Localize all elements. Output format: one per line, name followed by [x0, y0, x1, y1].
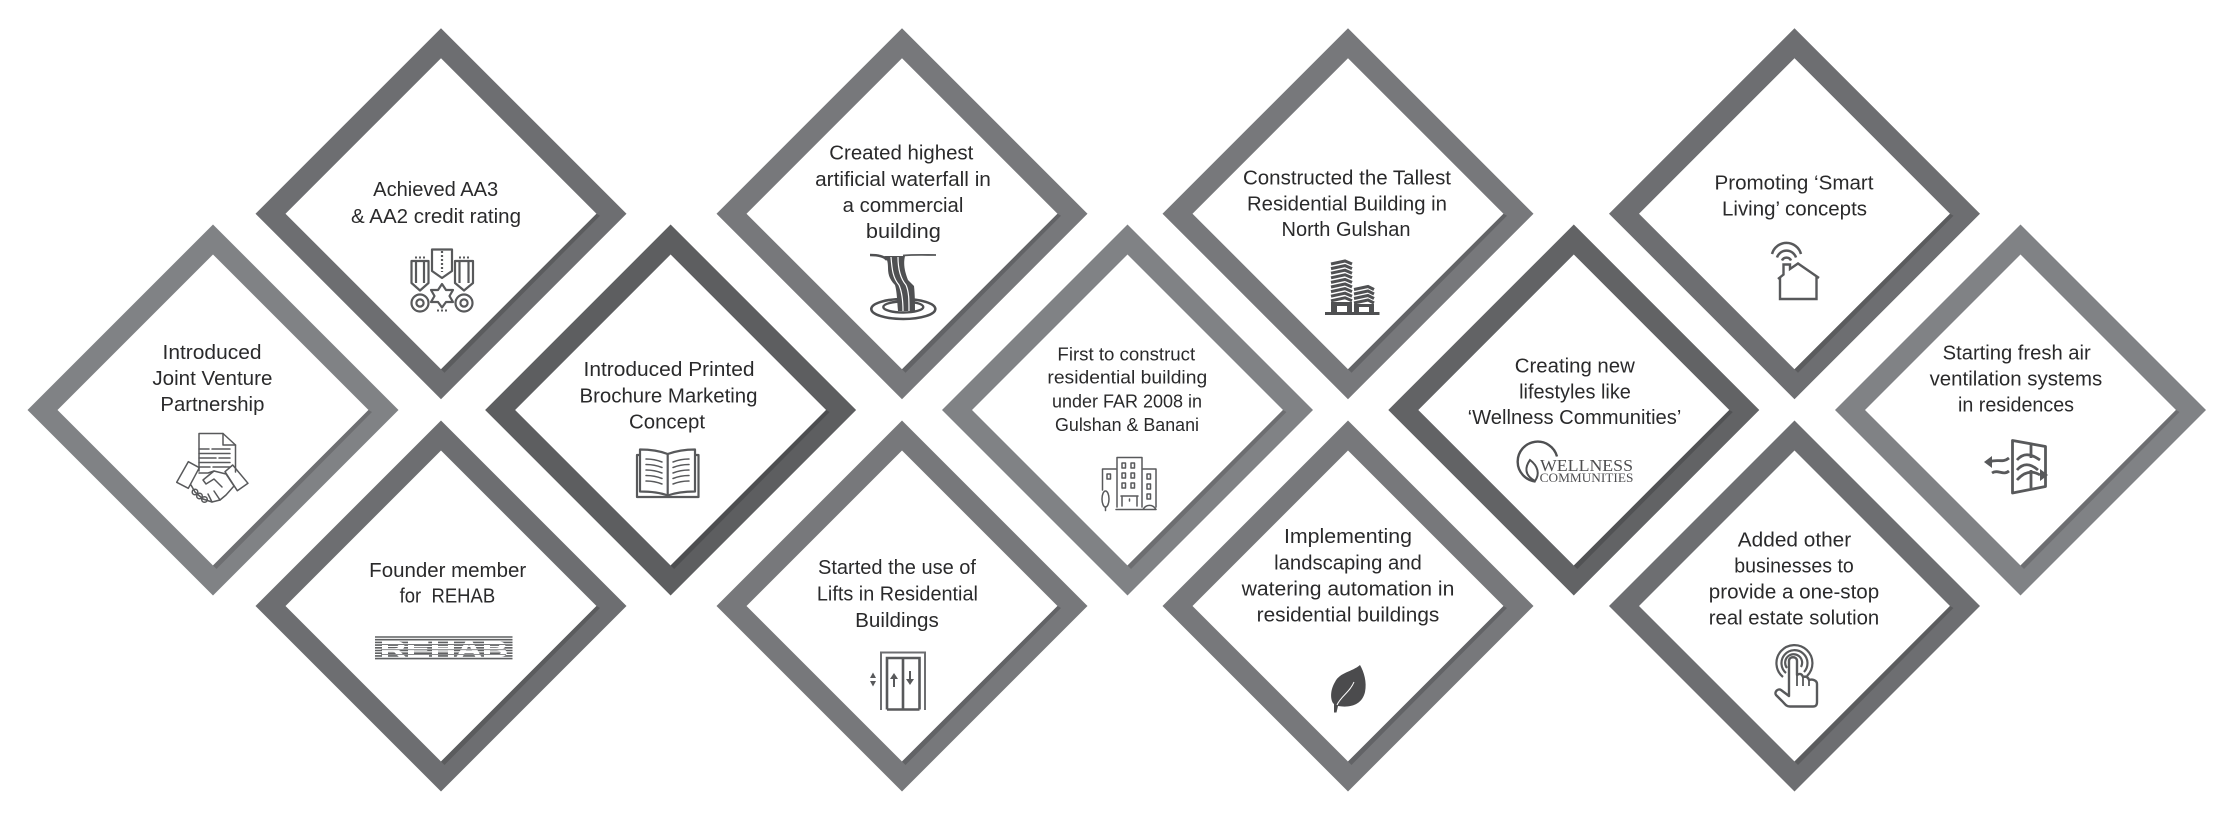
text: smart living: Living’ concepts: [1722, 198, 1867, 220]
panel: FAR 2008: [942, 224, 1313, 596]
text: tallest building: [1243, 168, 1451, 241]
text: FAR 2008: residential building: [1047, 368, 1207, 388]
panel: wellness communities: [1388, 224, 1759, 596]
icon: smart home: [1772, 243, 1819, 299]
text: founder member: [369, 560, 527, 608]
panel: one-stop solution: [1609, 420, 1980, 792]
panel: tallest building: [1162, 28, 1534, 399]
text: artificial waterfall: Created highest: [829, 143, 974, 165]
text: smart living: [1714, 173, 1874, 220]
text: lifts: Buildings: [855, 610, 939, 632]
text: artificial waterfall: artificial waterfall in: [815, 169, 991, 191]
logo: wellness communities: WELLNESS: [1540, 456, 1633, 475]
panel: founder member: [256, 420, 626, 792]
text: artificial waterfall: a commercial: [843, 195, 963, 217]
text: FAR 2008: Gulshan & Banani: [1055, 415, 1199, 435]
text: printed brochure: Concept: [629, 412, 705, 434]
text: wellness communities: [1468, 356, 1681, 429]
icon: window ventilation: [1984, 440, 2048, 493]
text: wellness communities: Creating new: [1515, 356, 1635, 378]
text: landscaping automation: watering automation in: [1241, 578, 1454, 600]
text: one-stop solution: Added other: [1738, 530, 1852, 552]
icon: tower blocks: [1325, 261, 1380, 315]
text: FAR 2008: under FAR 2008 in: [1052, 391, 1202, 411]
icon: leaf: [1331, 665, 1366, 712]
icon: medals: [412, 250, 473, 312]
panel: printed brochure: [485, 224, 856, 596]
text: credit rating: [351, 179, 521, 228]
logo: REHAB: [375, 637, 512, 662]
panel: fresh air ventilation: [1835, 224, 2206, 596]
text: joint venture: [152, 342, 272, 416]
text: printed brochure: [580, 359, 758, 434]
text: tallest building: Constructed the Tallest: [1243, 168, 1451, 190]
text: printed brochure: Brochure Marketing: [580, 386, 758, 408]
text: joint venture: Introduced: [162, 342, 262, 364]
text: landscaping automation: Implementing: [1284, 526, 1412, 548]
text: tallest building: Residential Building in: [1247, 193, 1447, 215]
text: founder member: for REHAB: [400, 586, 495, 608]
text: fresh air ventilation: in residences: [1958, 394, 2074, 416]
text: artificial waterfall: building: [866, 221, 941, 243]
panel: credit rating: [256, 28, 626, 399]
text: one-stop solution: businesses to: [1734, 556, 1854, 578]
text: joint venture: Joint Venture: [152, 368, 272, 390]
text: fresh air ventilation: ventilation systems: [1930, 368, 2102, 390]
text: lifts: Lifts in Residential: [817, 584, 978, 606]
icon: handshake and document: [177, 434, 248, 502]
logo: REHAB: REHAB: [380, 637, 508, 662]
text: landscaping automation: landscaping and: [1274, 552, 1422, 574]
text: lifts: Started the use of: [818, 557, 976, 579]
text: wellness communities: lifestyles like: [1519, 381, 1631, 403]
text: one-stop solution: provide a one-stop: [1709, 582, 1879, 604]
text: lifts: [817, 557, 978, 632]
text: wellness communities: ‘Wellness Communities’: [1468, 407, 1681, 429]
text: printed brochure: Introduced Printed: [584, 359, 754, 381]
logo: wellness communities: [1518, 442, 1633, 485]
logo: wellness communities: COMMUNITIES: [1540, 470, 1633, 485]
text: landscaping automation: [1241, 526, 1454, 627]
text: joint venture: Partnership: [160, 394, 264, 416]
text: fresh air ventilation: Starting fresh air: [1943, 343, 2091, 365]
text: artificial waterfall: [815, 143, 991, 243]
icon: touch gesture: [1775, 645, 1817, 706]
text: tallest building: North Gulshan: [1282, 219, 1410, 241]
text: founder member: Founder member: [369, 560, 527, 582]
text: FAR 2008: First to construct: [1057, 345, 1195, 365]
text: credit rating: Achieved AA3: [373, 179, 498, 201]
panel: joint venture: [28, 224, 398, 596]
text: credit rating: & AA2 credit rating: [351, 206, 521, 228]
panel: smart living: [1609, 28, 1980, 399]
panel: landscaping automation: [1162, 420, 1534, 792]
text: fresh air ventilation: [1930, 343, 2102, 416]
text: one-stop solution: real estate solution: [1709, 607, 1879, 629]
icon: waterfall: [870, 255, 936, 319]
text: landscaping automation: residential buildings: [1257, 605, 1439, 627]
text: smart living: Promoting ‘Smart: [1714, 173, 1874, 195]
icon: buildings: [1102, 458, 1156, 510]
text: FAR 2008: [1047, 345, 1207, 435]
icon: open book: [637, 450, 698, 497]
panel: lifts: [716, 420, 1088, 792]
text: one-stop solution: [1709, 530, 1879, 629]
icon: elevator: [870, 652, 925, 710]
panel: artificial waterfall: [716, 28, 1088, 399]
